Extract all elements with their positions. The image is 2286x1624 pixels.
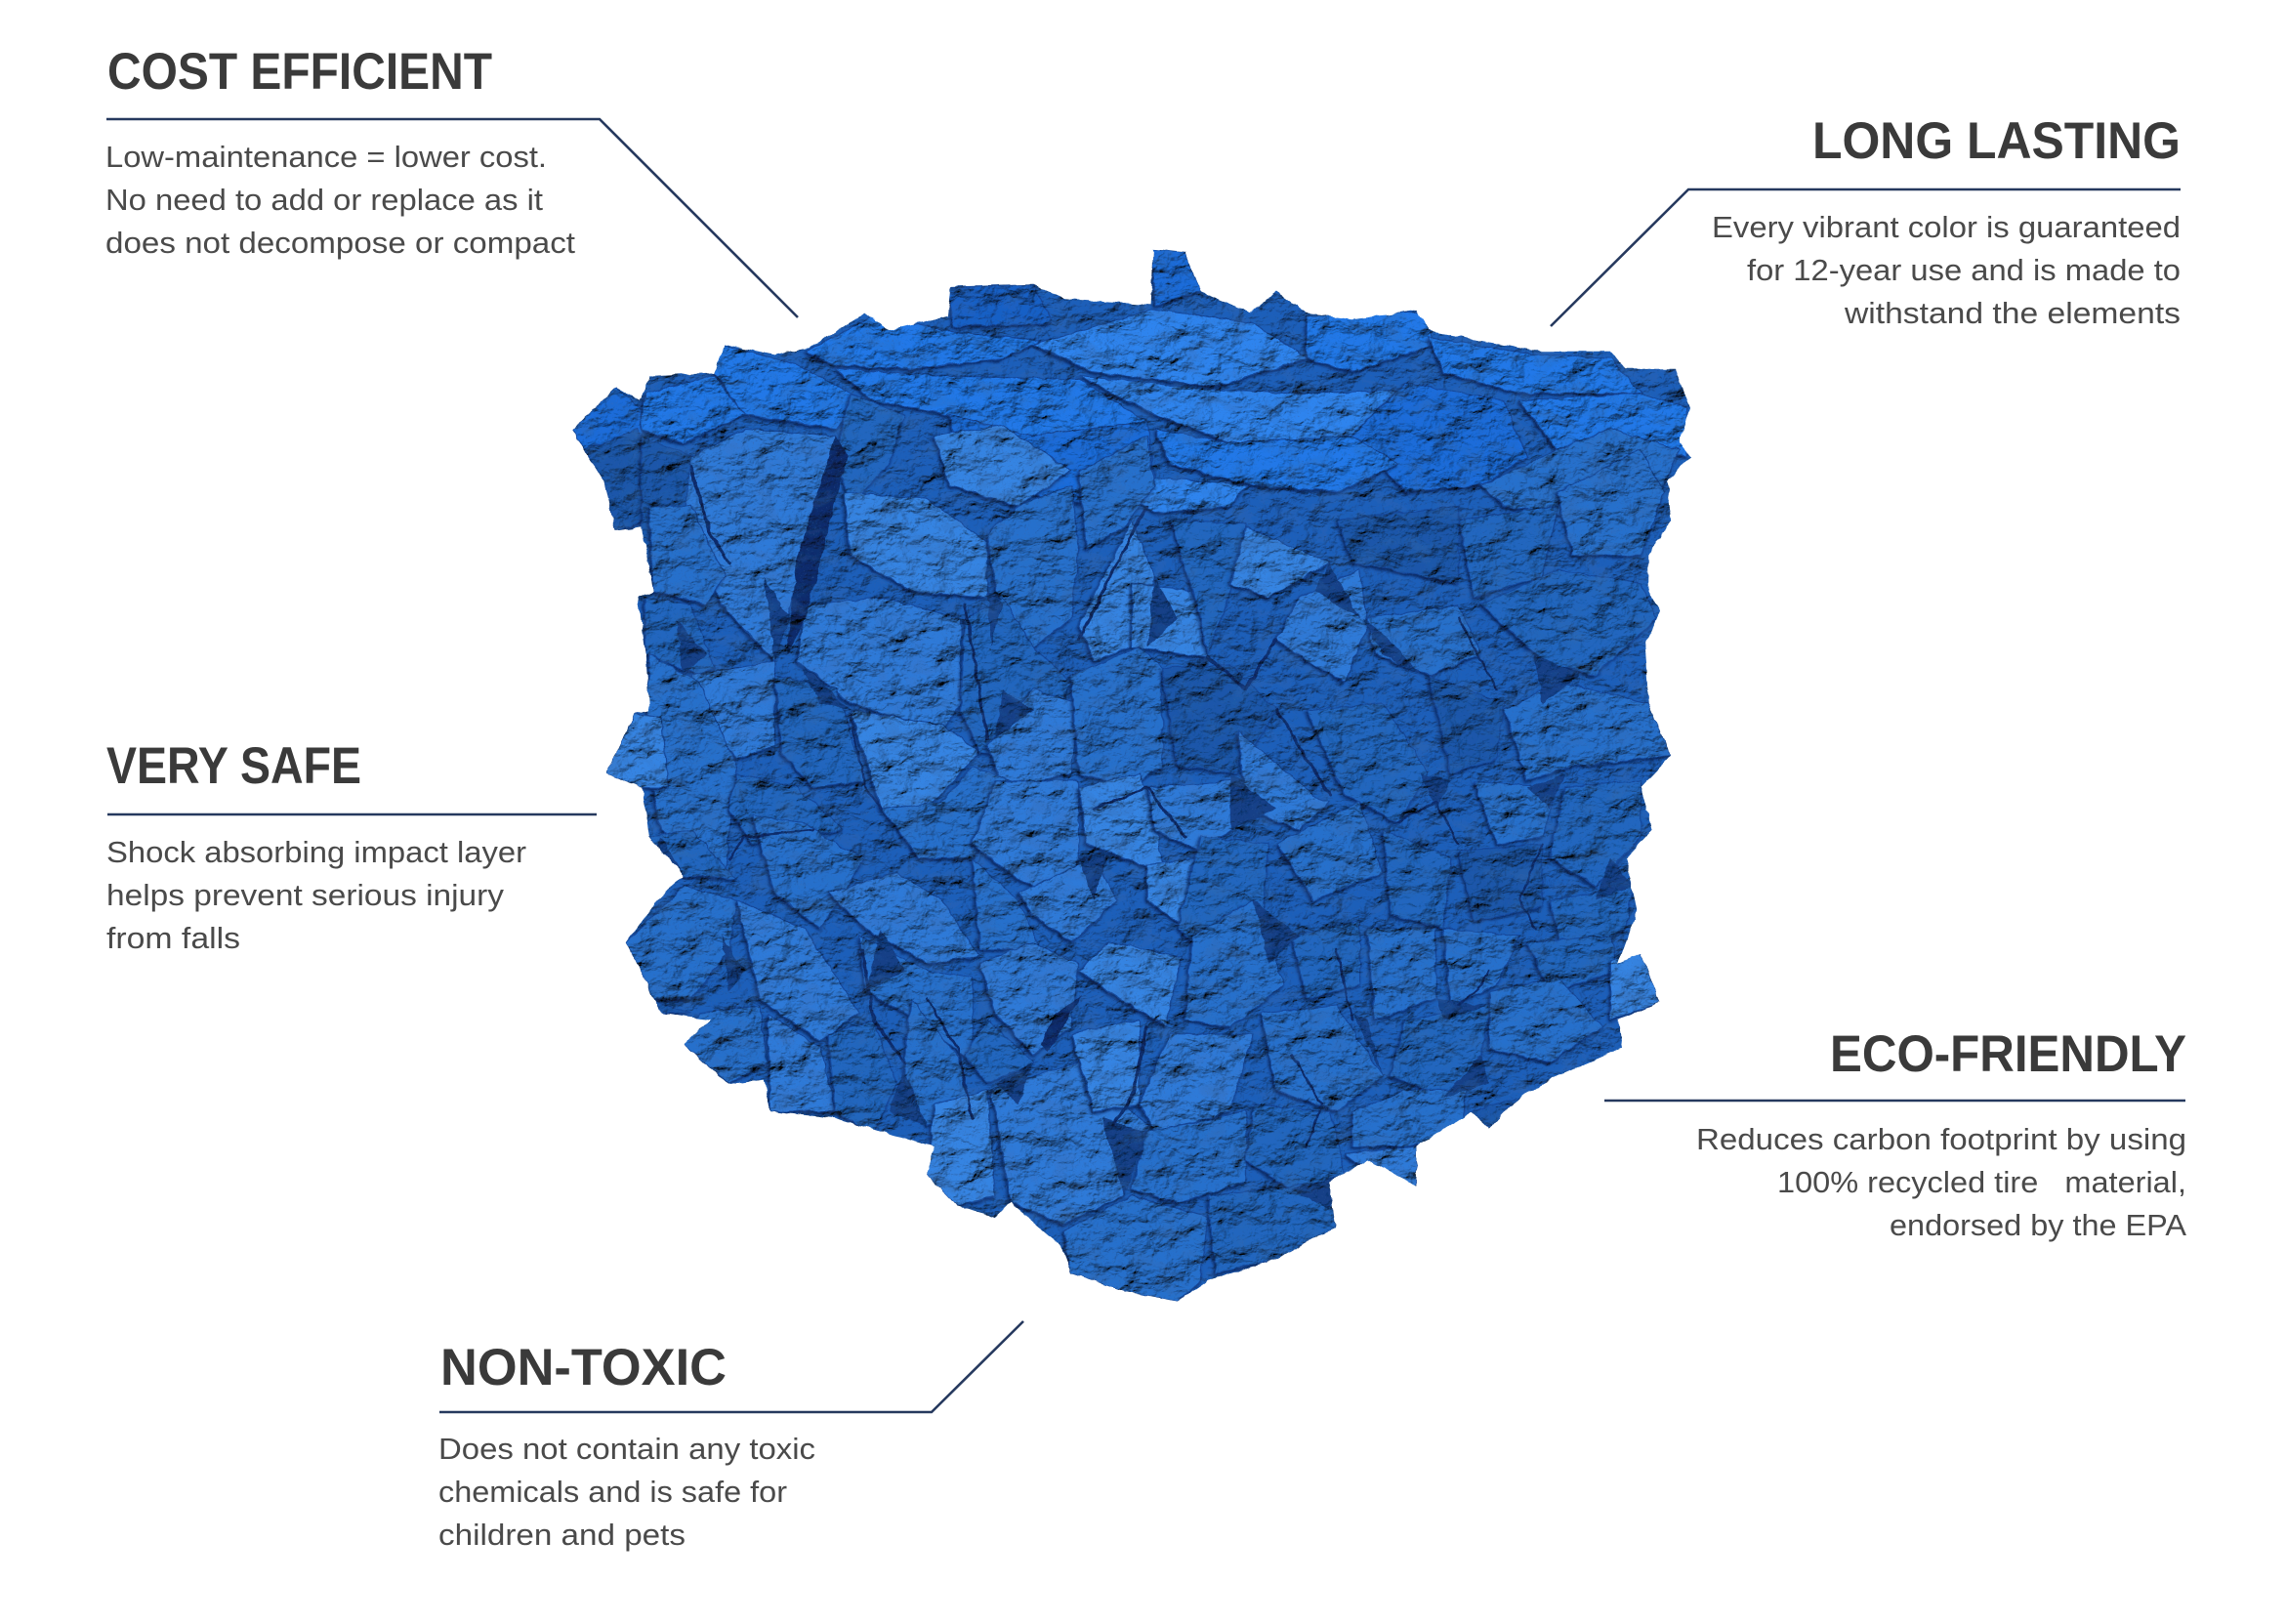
body: eco-friendly: Reduces carbon footprint by using	[1696, 1122, 2186, 1156]
heading: non-toxic: NON-TOXIC	[440, 1339, 727, 1396]
body: eco-friendly: endorsed by the EPA	[1890, 1208, 2186, 1242]
leader line: non-toxic	[439, 1321, 1023, 1412]
body: very safe: helps prevent serious injury	[106, 878, 505, 912]
body: non-toxic	[438, 1432, 815, 1552]
cube top face shards	[572, 249, 1686, 531]
image: blue rubber mulch cube	[572, 249, 1691, 1302]
body: long lasting: Every vibrant color is guaranteed	[1712, 210, 2181, 244]
body: eco-friendly	[1696, 1122, 2186, 1242]
body: very safe: from falls	[106, 921, 240, 955]
callout: cost efficient	[105, 43, 798, 317]
heading: long lasting: LONG LASTING	[1812, 112, 2181, 170]
body: very safe: Shock absorbing impact layer	[106, 835, 526, 869]
heading: eco-friendly: ECO-FRIENDLY	[1830, 1025, 2186, 1083]
callout: long lasting	[1551, 112, 2181, 330]
body: eco-friendly: 100% recycled tire material,	[1777, 1165, 2186, 1199]
cube left face shards	[606, 394, 1208, 1224]
cube right face shards	[1063, 450, 1672, 1302]
heading: cost efficient: COST EFFICIENT	[107, 43, 492, 101]
rule: very safe	[107, 813, 597, 815]
callout: eco-friendly	[1604, 1025, 2186, 1242]
cube surface relief and speckle	[572, 249, 1691, 1302]
heading: very safe: VERY SAFE	[106, 737, 361, 795]
body: long lasting: for 12-year use and is made to	[1747, 253, 2181, 287]
cube base silhouette	[582, 264, 1691, 1301]
leader line: cost efficient	[106, 119, 798, 317]
body: non-toxic: Does not contain any toxic	[438, 1432, 815, 1466]
body: cost efficient	[105, 140, 575, 260]
leader line: long lasting	[1551, 189, 2181, 326]
body: cost efficient: No need to add or replace as it	[105, 183, 543, 217]
rule: eco-friendly	[1604, 1100, 2185, 1102]
body: non-toxic: chemicals and is safe for	[438, 1475, 787, 1509]
callout: very safe	[106, 737, 597, 955]
body: long lasting	[1712, 210, 2181, 330]
callout: non-toxic	[438, 1321, 1023, 1552]
cube cracks	[691, 468, 1542, 1146]
body: cost efficient: does not decompose or compact	[105, 226, 575, 260]
body: non-toxic: children and pets	[438, 1518, 686, 1552]
cube crevice shadows	[653, 436, 1634, 1210]
body: cost efficient: Low-maintenance = lower cost.	[105, 140, 547, 174]
body: long lasting: withstand the elements	[1844, 296, 2181, 330]
body: very safe	[106, 835, 526, 955]
